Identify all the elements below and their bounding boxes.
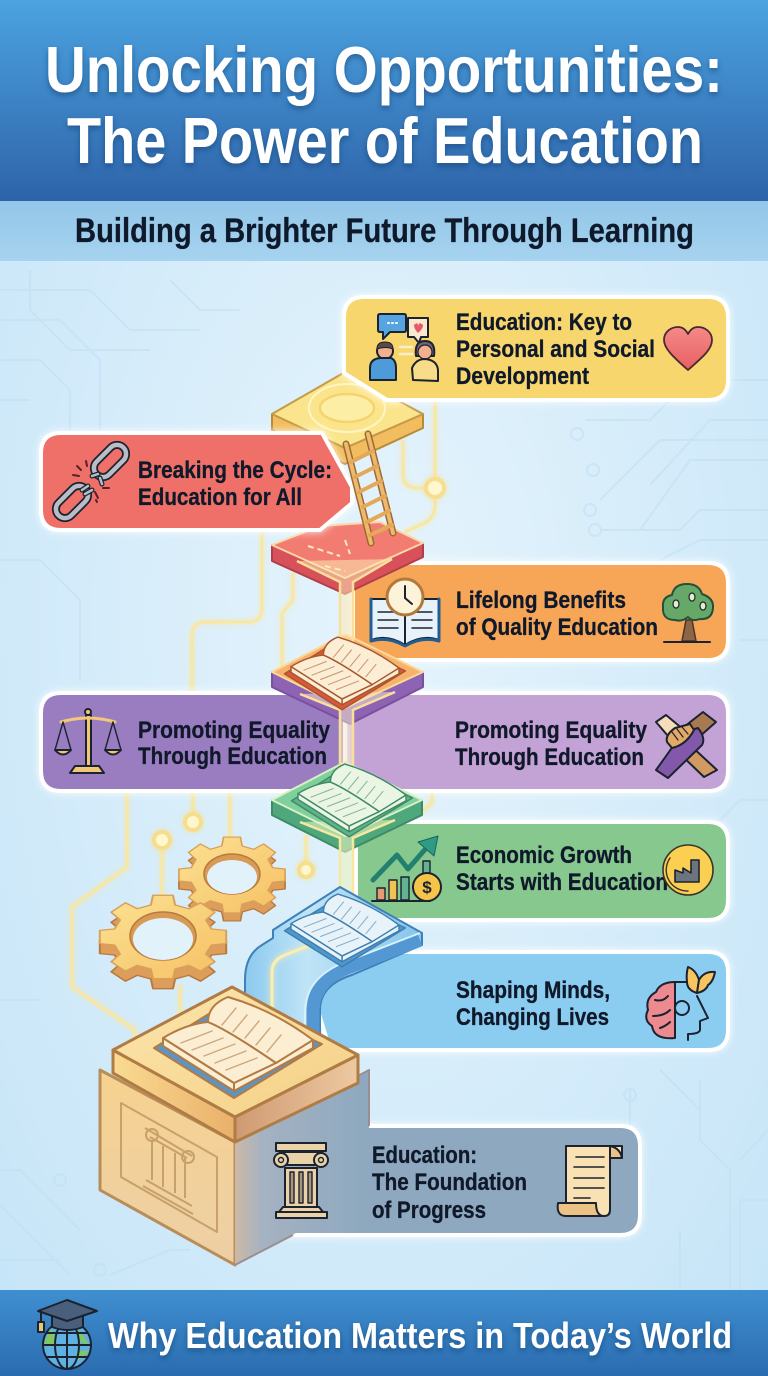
book: large on foundation — [154, 997, 322, 1098]
text: breaking the cycle — [138, 457, 332, 511]
trunk: green to blue — [300, 820, 395, 922]
subtitle band — [0, 201, 768, 261]
text: economic growth: Economic Growth — [456, 842, 632, 869]
block right face — [235, 1070, 369, 1265]
card: red background — [41, 433, 352, 530]
header banner — [0, 0, 768, 201]
text: foundation of progress: of Progress — [372, 1197, 486, 1224]
text: shaping minds: Changing Lives — [456, 1004, 609, 1031]
text: lifelong benefits — [456, 587, 658, 641]
icon: tree — [663, 584, 713, 642]
icon: people conversation — [370, 314, 438, 381]
footer band — [0, 1290, 768, 1376]
platform: red — [272, 522, 423, 594]
text: lifelong benefits: Lifelong Benefits — [456, 587, 626, 614]
book: orange — [285, 637, 405, 710]
icon: graduation globe — [38, 1300, 97, 1369]
text: breaking the cycle: Education for All — [138, 484, 302, 511]
text: promoting equality right: Through Education — [455, 744, 644, 771]
icon: brain and butterfly — [646, 967, 715, 1040]
icon: scales — [55, 709, 121, 773]
icon: column — [274, 1143, 328, 1218]
card: orange background — [353, 563, 728, 660]
text: shaping minds: Shaping Minds, — [456, 977, 610, 1004]
card: slate background — [250, 1126, 640, 1235]
platform: yellow — [272, 372, 423, 464]
card: yellow background — [344, 297, 728, 400]
icon: joined hands — [656, 712, 717, 778]
platform: green — [272, 762, 422, 852]
text: foundation of progress: The Foundation — [372, 1169, 527, 1196]
text: education key to personal and social development: Education: Key to — [456, 309, 632, 336]
icon: factory coin — [663, 845, 713, 895]
text: education key to personal and social development: Development — [456, 363, 589, 390]
trunk: purple to green — [300, 692, 395, 782]
block left face — [100, 1070, 235, 1265]
text: economic growth — [456, 842, 668, 896]
icon: growth chart — [372, 836, 441, 901]
trunk: red to purple — [297, 559, 392, 655]
text: foundation of progress: Education: — [372, 1142, 477, 1169]
card: green background — [356, 822, 728, 920]
text: promoting equality right: Promoting Equality — [455, 717, 648, 744]
icon: growth chart: $ — [422, 878, 432, 897]
text: economic growth: Starts with Education — [456, 869, 668, 896]
circuit lines — [72, 400, 435, 1050]
left face relief — [121, 1103, 217, 1232]
card: dark purple background — [41, 693, 345, 791]
text: breaking the cycle: Breaking the Cycle: — [138, 457, 332, 484]
text: lifelong benefits: of Quality Education — [456, 614, 658, 641]
text: promoting equality left: Promoting Equality — [138, 717, 331, 744]
ladder — [346, 434, 393, 543]
text: promoting equality right — [455, 717, 648, 771]
gear: large — [100, 895, 226, 989]
circuit nodes — [154, 479, 444, 1020]
text: education key to personal and social development: Personal and Social — [456, 336, 655, 363]
card: blue background — [300, 952, 728, 1050]
foundation block — [100, 987, 369, 1265]
icon: broken chain — [52, 441, 130, 522]
text: shaping minds — [456, 977, 610, 1031]
book: blue — [285, 894, 405, 967]
icon: heart — [664, 327, 712, 370]
card: light purple background — [345, 693, 728, 791]
text: foundation of progress — [372, 1142, 527, 1224]
title — [45, 33, 723, 177]
text: education key to personal and social development — [456, 309, 655, 390]
icon: book and clock — [371, 579, 439, 646]
icon: scroll — [558, 1146, 622, 1216]
book: green — [292, 764, 412, 837]
text: promoting equality left — [138, 717, 331, 770]
flowing blue ribbon — [245, 887, 422, 1070]
lid — [113, 1050, 235, 1142]
text: promoting equality left: Through Education — [138, 743, 327, 770]
platform: purple — [272, 634, 423, 724]
gear: small — [179, 837, 285, 921]
